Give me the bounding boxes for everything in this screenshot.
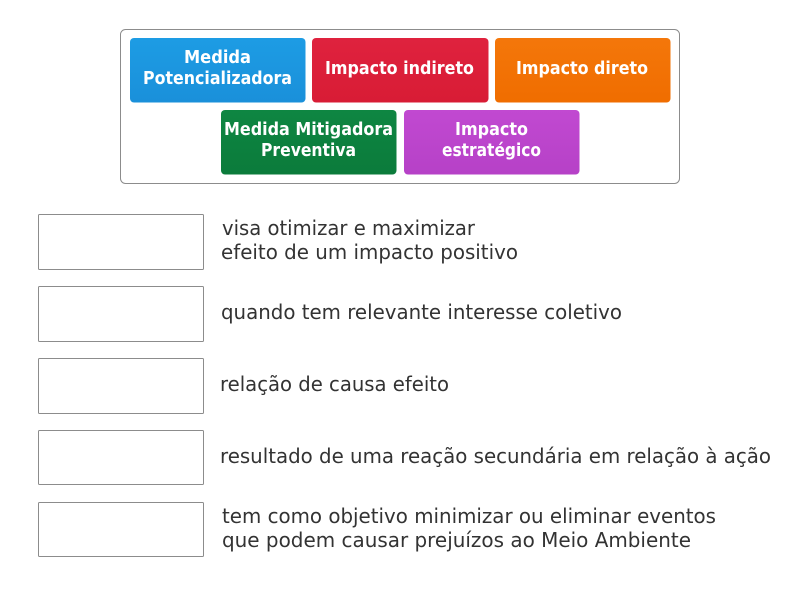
row 1: empty slot and description: visa otimizar e maximizar: [222, 216, 476, 240]
row 3: empty slot and description: [38, 358, 449, 414]
tile: Impacto indireto: [312, 38, 488, 102]
row 1: empty slot and description: efeito de um impacto positivo: [221, 240, 518, 264]
row 2: empty slot and description: quando tem relevante interesse coletivo: [221, 300, 622, 324]
row 5: empty slot and description: [38, 502, 716, 556]
row 1: empty slot and description: [38, 214, 518, 270]
tile: Impacto estratégico: Impacto: [455, 119, 528, 140]
tile: Impacto indireto: Impacto indireto: [325, 58, 474, 79]
tile: Medida Potencializadora: [130, 38, 306, 102]
row 2: empty slot and description: [38, 286, 622, 342]
row 4: empty slot and description: [38, 430, 771, 484]
row 4: empty slot and description: resultado de uma reação secundária em relação à ação: [220, 444, 771, 468]
tile: Impacto estratégico: estratégico: [442, 140, 541, 161]
row 3: empty slot and description: relação de causa efeito: [220, 372, 449, 396]
tile: Medida Mitigadora Preventiva: Medida Mitigadora: [224, 119, 393, 140]
tile: Medida Potencializadora: Medida: [184, 47, 251, 68]
panel: answer tiles: [120, 30, 680, 184]
tile: Impacto direto: Impacto direto: [516, 58, 648, 79]
tile: Medida Mitigadora Preventiva: Preventiva: [261, 140, 356, 161]
tile: Impacto direto: [495, 38, 670, 102]
tile: Impacto estratégico: [404, 110, 580, 174]
row 5: empty slot and description: que podem causar prejuízos ao Meio Ambiente: [222, 528, 691, 552]
row 5: empty slot and description: tem como objetivo minimizar ou eliminar eventos: [222, 504, 716, 528]
tile: Medida Potencializadora: Potencializadora: [143, 68, 292, 89]
tile: Medida Mitigadora Preventiva: [221, 110, 396, 174]
